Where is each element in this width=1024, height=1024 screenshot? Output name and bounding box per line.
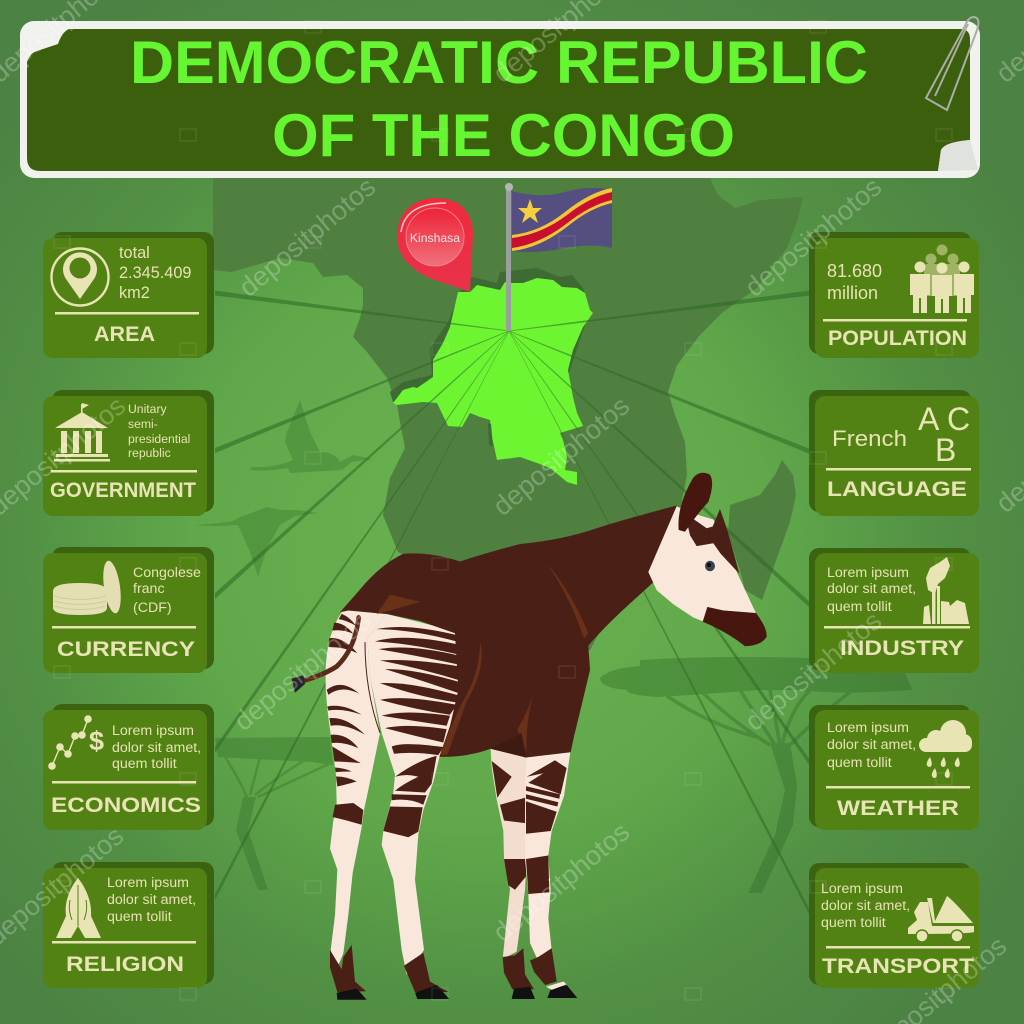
near front leg xyxy=(525,750,577,998)
panel: language xyxy=(809,390,979,516)
body shading xyxy=(377,563,588,755)
watermarks: depositphotos xyxy=(487,817,635,948)
panel: population xyxy=(809,232,979,358)
capital pin: Kinshasa xyxy=(397,198,473,292)
watermarks: depositphotos xyxy=(739,606,887,737)
government text: presidential xyxy=(128,432,190,446)
heading: LANGUAGE xyxy=(827,478,967,501)
heading: GOVERNMENT xyxy=(50,479,196,502)
okapi illustration xyxy=(292,473,767,1000)
government text: republic xyxy=(128,446,171,460)
icon: location pin in circle xyxy=(52,248,108,306)
connector lines xyxy=(215,290,810,916)
currency text: franc xyxy=(133,581,165,597)
population text: 81.680 xyxy=(827,261,882,281)
icon: factory xyxy=(923,557,969,624)
government text: semi- xyxy=(128,417,158,431)
transport text: dolor sit amet, xyxy=(821,898,910,914)
flag pole xyxy=(505,183,513,331)
economics text: dolor sit amet, xyxy=(112,740,201,756)
acacia tree silhouette: left xyxy=(215,737,333,890)
icon: government building xyxy=(54,403,110,462)
heading: RELIGION xyxy=(66,953,184,976)
watermarks: depositphotos xyxy=(487,391,635,522)
title banner xyxy=(20,21,980,178)
map: DRC shadow xyxy=(390,268,590,402)
title text: DEMOCRATIC REPUBLIC xyxy=(130,29,868,96)
capital pin: Kinshasa: Kinshasa xyxy=(410,231,460,245)
icon: growth chart and dollar: $ xyxy=(89,726,104,756)
hind hooves xyxy=(337,985,449,1000)
ear xyxy=(678,473,712,532)
population text: million xyxy=(827,283,878,303)
panel: government xyxy=(43,390,214,516)
hind leg stripes xyxy=(327,614,463,786)
transport text: Lorem ipsum xyxy=(821,881,903,897)
panel: transport xyxy=(809,863,979,988)
title text xyxy=(130,29,868,169)
heading: INDUSTRY xyxy=(840,637,964,660)
eye xyxy=(705,561,715,571)
area text: 2.345.409 xyxy=(119,264,191,282)
industry text: dolor sit amet, xyxy=(827,581,916,597)
icon: letters: B xyxy=(935,432,956,468)
icon: growth chart and dollar xyxy=(48,715,104,770)
title text: OF THE CONGO xyxy=(272,102,735,169)
far front leg xyxy=(491,749,535,999)
currency text: Congolese xyxy=(133,565,201,581)
heading: WEATHER xyxy=(837,797,959,820)
map: DRC notch shadow xyxy=(488,423,493,447)
language text: French xyxy=(832,426,907,451)
icon: letters xyxy=(918,401,970,468)
panel: religion xyxy=(43,862,214,988)
thigh line xyxy=(365,642,380,733)
industry text: quem tollit xyxy=(827,599,892,615)
heading: ECONOMICS xyxy=(51,794,201,817)
area text: total xyxy=(119,244,150,262)
icon: praying hands xyxy=(56,878,101,938)
muzzle xyxy=(703,607,767,646)
panel: industry xyxy=(809,548,979,673)
icon: star xyxy=(518,199,542,223)
bird silhouettes xyxy=(195,400,373,577)
icon: dump truck xyxy=(908,896,974,942)
acacia tree silhouette: right xyxy=(600,657,912,893)
heading: TRANSPORT xyxy=(822,955,974,978)
flag of DRC xyxy=(512,188,612,252)
head xyxy=(648,506,756,622)
weather text: dolor sit amet, xyxy=(827,737,916,753)
religion text: quem tollit xyxy=(107,909,172,925)
weather text: Lorem ipsum xyxy=(827,720,909,736)
government text: Unitary xyxy=(128,402,168,416)
icon: letters: A xyxy=(918,401,940,437)
panel: currency xyxy=(43,547,214,673)
panel: economics xyxy=(43,704,214,830)
industry text: Lorem ipsum xyxy=(827,565,909,581)
religion text: dolor sit amet, xyxy=(107,892,196,908)
icon: letters: C xyxy=(947,401,970,437)
watermarks: depositphotos xyxy=(233,172,381,303)
heading: POPULATION xyxy=(828,327,967,350)
heading: CURRENCY xyxy=(57,638,195,661)
tail xyxy=(297,618,359,682)
icon: rain cloud xyxy=(919,720,972,778)
panel: area xyxy=(43,232,214,358)
economics text: Lorem ipsum xyxy=(112,723,194,739)
okapi body and neck xyxy=(340,506,677,758)
hind leg bands xyxy=(330,756,448,992)
map: DRC xyxy=(393,278,593,485)
economics text: quem tollit xyxy=(112,756,177,772)
map of Africa silhouette xyxy=(213,175,803,650)
panel: weather xyxy=(809,705,979,830)
icon: coins xyxy=(53,560,124,615)
transport text: quem tollit xyxy=(821,915,886,931)
icon: paperclip xyxy=(926,17,978,110)
weather text: quem tollit xyxy=(827,755,892,771)
religion text: Lorem ipsum xyxy=(107,875,189,891)
watermarks: depositphotos xyxy=(739,172,887,303)
heading: AREA xyxy=(94,323,155,346)
watermarks: depositphotos xyxy=(228,606,376,737)
icon: people xyxy=(910,244,974,313)
hind legs xyxy=(326,610,460,975)
currency text: (CDF) xyxy=(133,600,172,616)
area text: km2 xyxy=(119,284,150,302)
